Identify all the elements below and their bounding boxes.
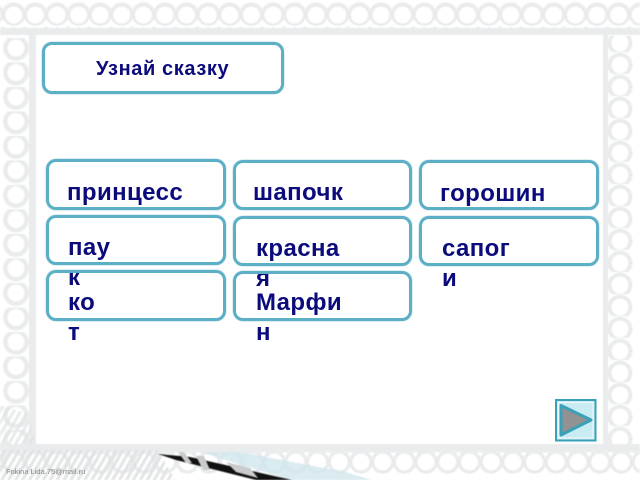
credit text: Fokina Lida.75@mail.ru xyxy=(6,467,85,476)
word wrapped xyxy=(256,235,340,292)
word wrapped xyxy=(442,235,510,292)
word wrapped: ко xyxy=(68,289,95,316)
word wrapped: красна xyxy=(256,235,340,262)
answer box: шапочк xyxy=(233,160,412,210)
word wrapped: н xyxy=(256,319,271,346)
answer box: красная xyxy=(233,216,412,266)
word wrapped xyxy=(68,289,95,346)
answer box: горошин xyxy=(419,160,599,210)
answer box: паук xyxy=(46,215,226,265)
word wrapped xyxy=(256,289,342,346)
word wrapped: и xyxy=(442,265,457,292)
word wrapped: Марфи xyxy=(256,289,342,316)
title box xyxy=(42,42,284,94)
icon: next arrow button xyxy=(555,399,596,442)
title text: Узнай сказку xyxy=(96,58,229,80)
word wrapped: я xyxy=(256,265,270,292)
word: принцесс xyxy=(67,179,183,206)
word wrapped: т xyxy=(68,319,80,346)
word wrapped xyxy=(68,234,110,291)
answer box: кот xyxy=(46,270,226,321)
answer box: сапоги xyxy=(419,216,599,266)
word wrapped: сапог xyxy=(442,235,510,262)
word: горошин xyxy=(440,180,546,207)
answer box: Марфин xyxy=(233,271,412,321)
word wrapped: к xyxy=(68,264,80,291)
word wrapped: пау xyxy=(68,234,110,261)
word: шапочк xyxy=(253,179,343,206)
answer box: принцесс xyxy=(46,159,226,210)
